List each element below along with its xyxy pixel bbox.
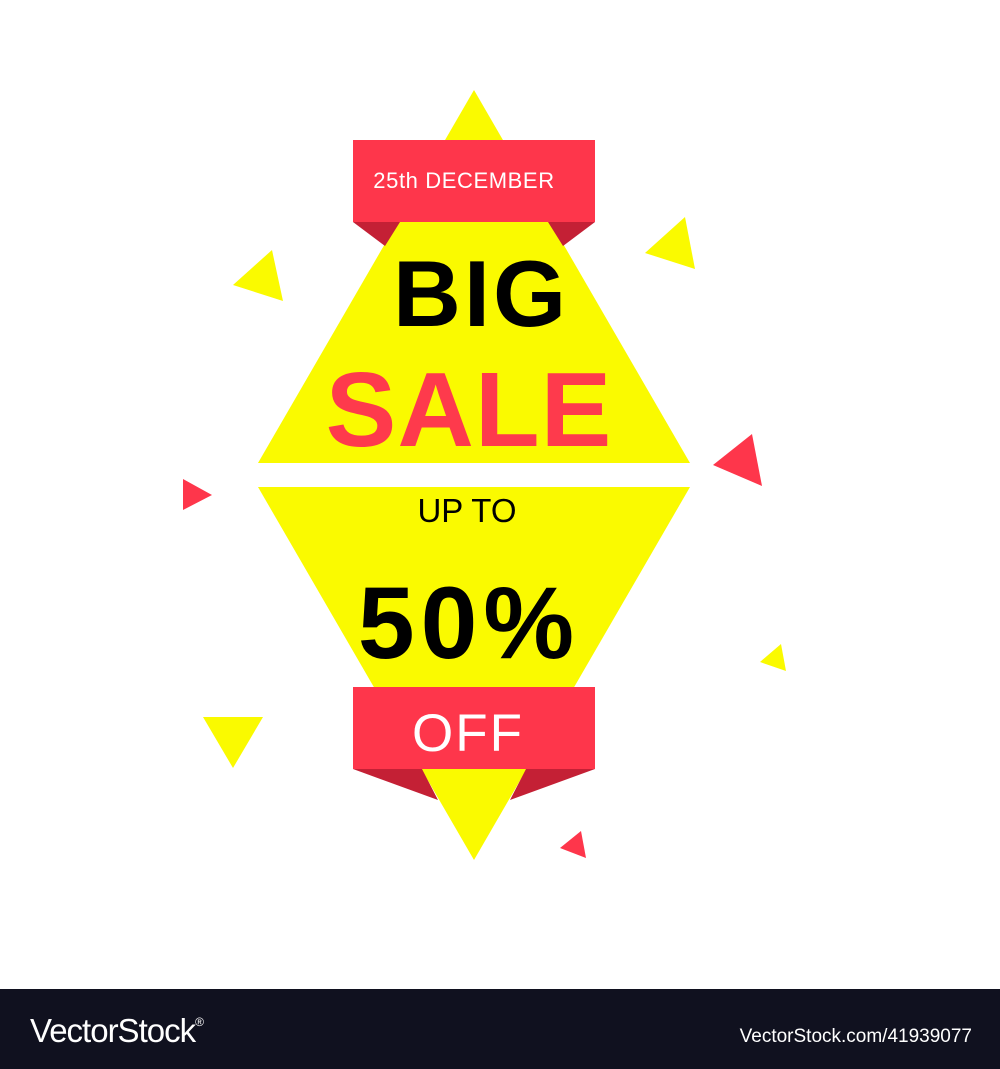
bottom ribbon [353,687,595,800]
footer bar [0,989,1000,1069]
top ribbon [353,140,595,246]
confetti triangles [183,217,786,858]
footer logo: ® [195,1015,204,1029]
text: 50%: 50% [358,566,580,680]
text: UP TO: UP TO [417,492,517,529]
footer url: VectorStock.com/41939077 [740,1026,972,1047]
upper yellow triangle [258,90,690,463]
footer logo: VectorStock [30,1012,195,1049]
lower yellow triangle [258,487,690,860]
ribbon text: date: 25th DECEMBER [373,168,555,193]
heading: BIG: BIG [393,241,569,346]
heading: SALE: SALE [326,351,612,469]
ribbon text: OFF: OFF [412,704,524,763]
